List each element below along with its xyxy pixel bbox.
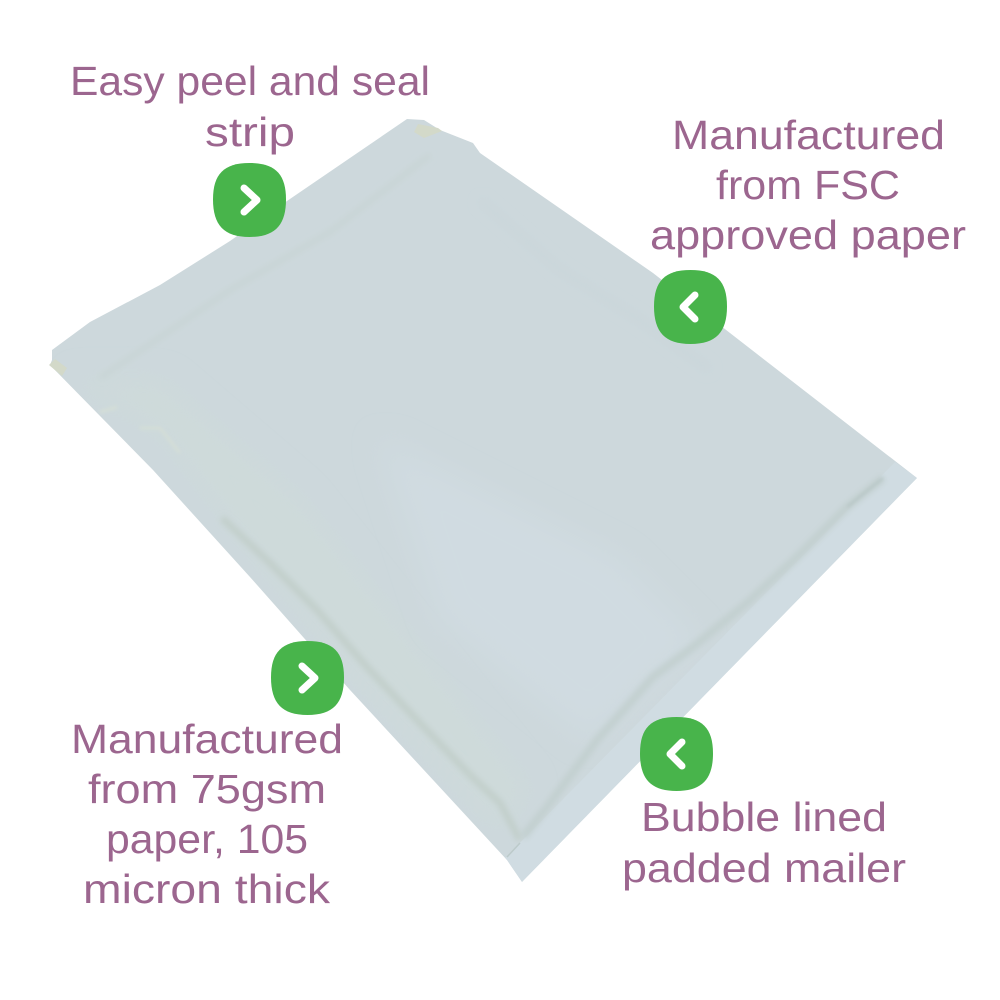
label text: padded mailer bbox=[622, 845, 906, 891]
label text bbox=[71, 716, 343, 912]
label text: micron thick bbox=[83, 866, 331, 912]
lighter central highlight bbox=[380, 440, 700, 740]
peel strip tab: left bbox=[49, 359, 67, 376]
upper-right inner shadow bbox=[480, 200, 710, 370]
icon: left chevron button bbox=[654, 270, 727, 344]
bottom flap crease bbox=[523, 478, 883, 837]
peel strip fold bbox=[100, 155, 430, 378]
label text: Easy peel and seal bbox=[70, 58, 430, 104]
label text: Manufactured bbox=[672, 112, 945, 158]
icon: right chevron button bbox=[271, 641, 344, 715]
label text: from FSC bbox=[716, 162, 900, 208]
callout: manufactured from 75gsm paper bbox=[71, 641, 344, 912]
icon: left chevron button bbox=[640, 717, 713, 791]
label text: paper, 105 bbox=[106, 816, 308, 862]
callout: manufactured from FSC approved paper bbox=[650, 112, 966, 344]
label text bbox=[622, 794, 906, 891]
lower-left creases bbox=[100, 407, 180, 453]
label text: Bubble lined bbox=[641, 794, 887, 840]
padded mailer envelope bbox=[49, 119, 917, 882]
label text: strip bbox=[205, 109, 295, 155]
green-tinted lower-left shading bbox=[70, 380, 530, 830]
label text bbox=[650, 112, 966, 258]
peel strip tab: top bbox=[414, 124, 442, 138]
infographic canvas bbox=[49, 66, 966, 904]
callout: bubble lined padded mailer bbox=[622, 717, 906, 891]
label text bbox=[70, 58, 430, 155]
callout: easy peel and seal strip bbox=[70, 58, 430, 237]
bottom flap bbox=[506, 842, 522, 876]
icon: right chevron button bbox=[213, 163, 286, 237]
label text: Manufactured bbox=[71, 716, 343, 762]
label text: from 75gsm bbox=[88, 766, 326, 812]
label text: approved paper bbox=[650, 212, 966, 258]
